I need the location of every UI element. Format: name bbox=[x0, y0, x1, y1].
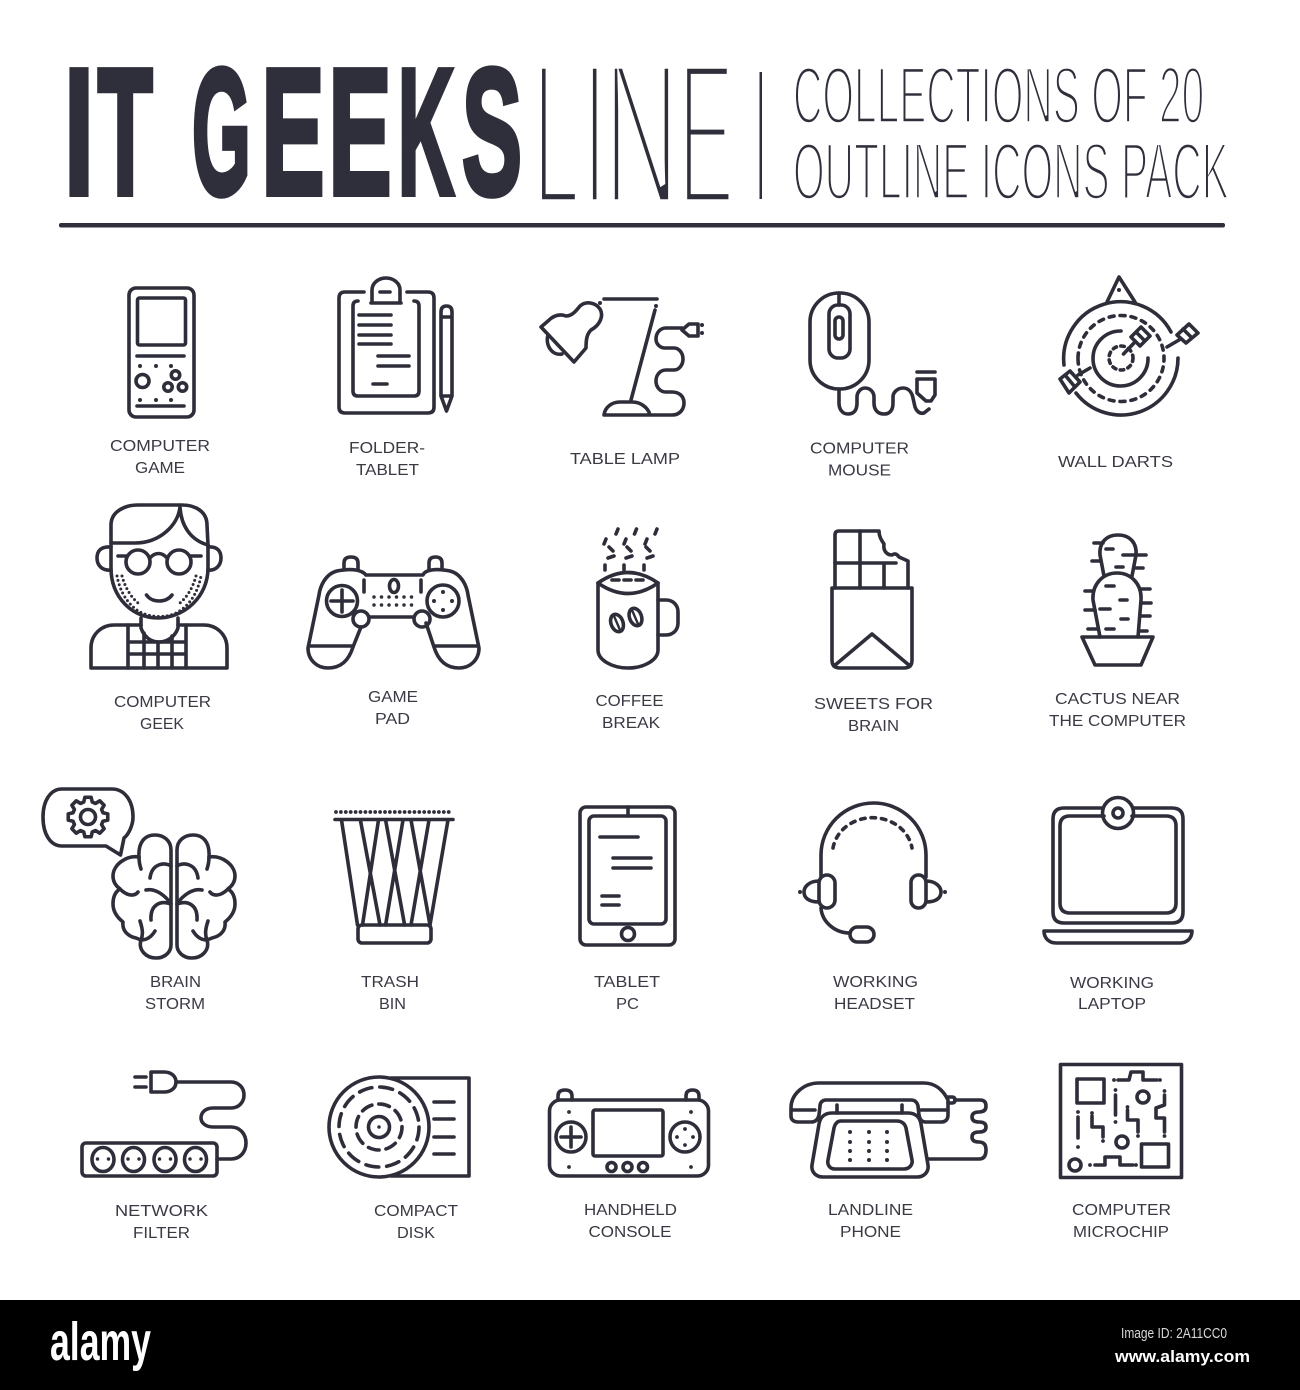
icon: right brain lobe bbox=[177, 835, 235, 958]
panel: sweets for brain bbox=[814, 531, 933, 735]
icon: clipboard and pencil bbox=[339, 278, 452, 413]
icon: handheld console bbox=[550, 1090, 708, 1176]
title: IT GEEKS: I bbox=[64, 32, 94, 233]
label: BRAIN bbox=[150, 974, 201, 991]
panel: computer mouse bbox=[810, 293, 935, 480]
footer band bbox=[0, 1300, 1300, 1390]
label: CONSOLE bbox=[588, 1224, 672, 1241]
panel: compact disk bbox=[329, 1077, 469, 1242]
panel: cactus near the computer bbox=[1049, 535, 1186, 730]
icon: tablet bbox=[580, 807, 675, 945]
label bbox=[349, 440, 425, 479]
panel: computer geek bbox=[91, 505, 227, 733]
panel: computer microchip bbox=[1060, 1064, 1182, 1241]
subtitle line 2: OUTLINE ICONS PACK bbox=[793, 126, 1229, 217]
panel: brain storm bbox=[43, 789, 235, 1013]
title: IT GEEKS: E bbox=[328, 32, 392, 233]
label bbox=[361, 974, 419, 1013]
panel: game pad bbox=[308, 557, 479, 728]
icon: gamepad bbox=[308, 557, 479, 668]
header rule bbox=[59, 223, 1225, 228]
panel: working laptop bbox=[1044, 798, 1192, 1013]
title: IT GEEKS: K bbox=[398, 32, 454, 233]
label: COMPUTER bbox=[110, 438, 210, 455]
label: GAME bbox=[368, 689, 418, 706]
label: COMPUTER bbox=[1072, 1202, 1171, 1219]
label: DISK bbox=[397, 1225, 435, 1242]
title: IT GEEKS: T bbox=[98, 32, 153, 233]
label: NETWORK bbox=[115, 1203, 208, 1220]
label: TABLET bbox=[356, 462, 419, 479]
icon: geek with glasses bbox=[91, 505, 227, 668]
label: PHONE bbox=[840, 1224, 901, 1241]
label bbox=[814, 696, 933, 735]
icon: chocolate bar bbox=[832, 531, 912, 668]
label: FOLDER- bbox=[349, 440, 425, 457]
panel: network filter bbox=[82, 1072, 246, 1242]
label bbox=[114, 694, 211, 733]
label: PAD bbox=[375, 711, 410, 728]
label: GEEK bbox=[140, 716, 184, 733]
label bbox=[833, 974, 918, 1013]
label: WORKING bbox=[833, 974, 918, 991]
label bbox=[1072, 1202, 1171, 1241]
icon: speech bubble bbox=[43, 789, 133, 855]
panel: landline phone bbox=[791, 1083, 986, 1241]
label: WORKING bbox=[1070, 975, 1154, 992]
label: FILTER bbox=[133, 1225, 190, 1242]
label: MICROCHIP bbox=[1073, 1224, 1169, 1241]
label: TABLE LAMP bbox=[570, 451, 680, 468]
icon: coffee mug bbox=[598, 529, 678, 668]
panel: coffee break bbox=[596, 529, 678, 732]
label bbox=[828, 1202, 913, 1241]
label bbox=[115, 1203, 208, 1242]
panel: folder-tablet bbox=[339, 278, 452, 479]
label: PC bbox=[616, 996, 639, 1013]
icon: power strip bbox=[82, 1072, 246, 1176]
label bbox=[368, 689, 418, 728]
label bbox=[1070, 975, 1154, 1013]
label: BIN bbox=[379, 996, 406, 1013]
label: BRAIN bbox=[848, 718, 899, 735]
icon: disk with sleeve bbox=[329, 1077, 469, 1177]
icon: cactus in pot bbox=[1082, 535, 1153, 665]
icon: dartboard bbox=[1060, 277, 1198, 415]
label: BREAK bbox=[602, 715, 660, 732]
label: STORM bbox=[145, 996, 205, 1013]
title divider bbox=[760, 72, 762, 199]
panel: table lamp bbox=[541, 299, 702, 468]
label bbox=[584, 1202, 677, 1241]
icon: gear bbox=[68, 797, 108, 837]
label: LANDLINE bbox=[828, 1202, 913, 1219]
label: GAME bbox=[135, 460, 185, 477]
label: CACTUS NEAR bbox=[1055, 691, 1180, 708]
label: MOUSE bbox=[828, 462, 891, 480]
label bbox=[374, 1203, 458, 1242]
panel: working headset bbox=[800, 803, 945, 1013]
panel: wall darts bbox=[1058, 277, 1198, 471]
icon: headset bbox=[800, 803, 945, 942]
label: THE COMPUTER bbox=[1049, 713, 1186, 730]
title: LINE: E bbox=[678, 20, 734, 249]
image id: Image ID: 2A11CC0 bbox=[1121, 1325, 1227, 1342]
icon: laptop with webcam bbox=[1044, 798, 1192, 943]
label bbox=[145, 974, 205, 1013]
title: LINE: I bbox=[583, 20, 606, 249]
label: COMPUTER bbox=[810, 440, 909, 458]
label: TRASH bbox=[361, 974, 419, 991]
icon: handheld game bbox=[129, 288, 194, 417]
label: LAPTOP bbox=[1078, 996, 1146, 1013]
label: WALL DARTS bbox=[1058, 454, 1173, 471]
label bbox=[596, 693, 664, 732]
icon: brain with gear bubble bbox=[43, 789, 235, 958]
panel: computer game bbox=[110, 288, 210, 477]
icon: telephone bbox=[791, 1083, 986, 1177]
label: HANDHELD bbox=[584, 1202, 677, 1219]
label bbox=[1049, 691, 1186, 730]
label: TABLET bbox=[594, 974, 660, 991]
title: IT GEEKS: S bbox=[462, 32, 522, 233]
icon: desk lamp bbox=[541, 299, 702, 415]
label: COFFEE bbox=[596, 693, 664, 710]
title: IT GEEKS: E bbox=[262, 32, 324, 233]
footer logo: alamy bbox=[50, 1312, 151, 1372]
title: LINE: L bbox=[533, 20, 580, 249]
icon: waste basket bbox=[335, 812, 453, 943]
panel: trash bin bbox=[335, 812, 453, 1013]
label bbox=[594, 974, 660, 1013]
label: COMPACT bbox=[374, 1203, 458, 1220]
icon: circuit board bbox=[1060, 1064, 1182, 1178]
icon: left brain lobe bbox=[113, 835, 171, 958]
panel: handheld console bbox=[550, 1090, 708, 1241]
label: HEADSET bbox=[834, 996, 915, 1013]
label: SWEETS FOR bbox=[814, 696, 933, 713]
label bbox=[110, 438, 210, 477]
subtitle line 1: COLLECTIONS OF 20 bbox=[793, 50, 1204, 141]
title: IT GEEKS: G bbox=[192, 32, 251, 233]
label: COMPUTER bbox=[114, 694, 211, 711]
title: LINE: N bbox=[604, 20, 679, 249]
website: www.alamy.com bbox=[1114, 1347, 1250, 1366]
panel: tablet pc bbox=[580, 807, 675, 1013]
icon: mouse with cable bbox=[810, 293, 935, 414]
label bbox=[810, 440, 909, 480]
